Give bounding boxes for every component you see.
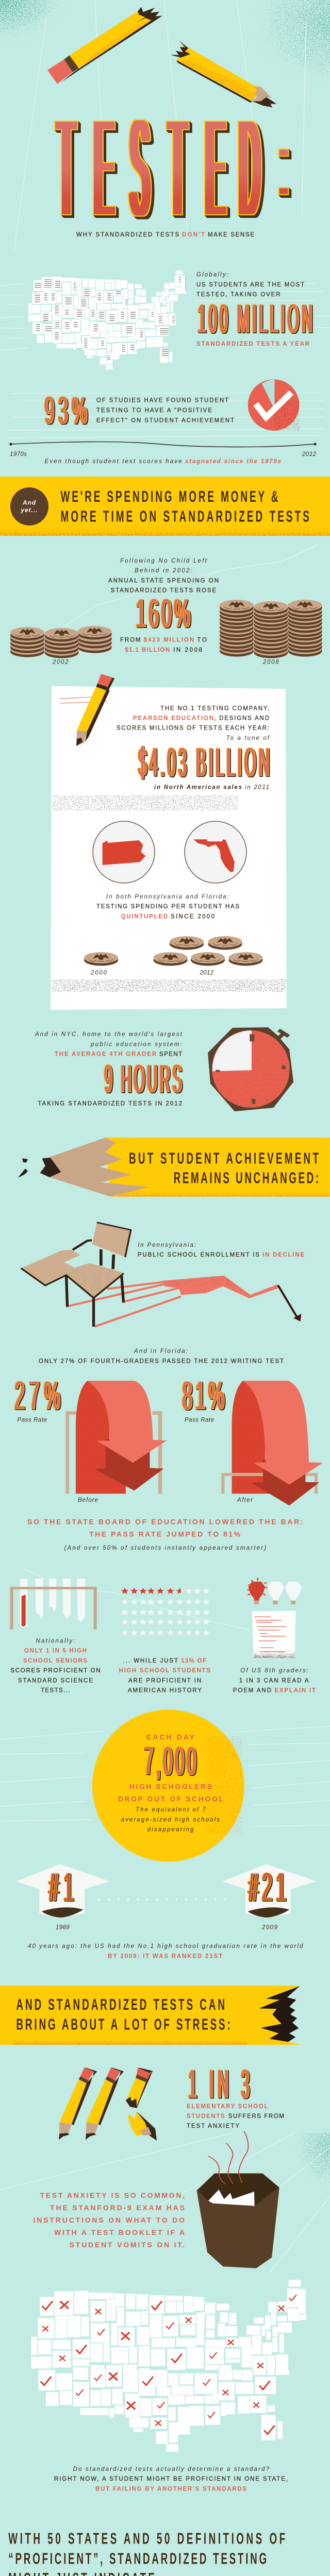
stat: 7,000: 7,000 xyxy=(144,1738,196,1783)
coin stacks: 2008 xyxy=(220,600,322,666)
year labels xyxy=(56,1924,278,1930)
heading: AND STANDARDIZED TESTS CAN xyxy=(16,1996,225,2013)
chart: after, bar lowered xyxy=(221,1381,323,1505)
text: american history: ... WHILE JUST xyxy=(123,1658,178,1664)
icon: Florida xyxy=(185,821,246,883)
text: quintupled: SINCE 2000 xyxy=(171,913,214,920)
text: nyc xyxy=(35,1031,183,1058)
text: quintupled: In both Pennsylvania and Florida: xyxy=(106,894,229,900)
text: no.1 testing company: To a tune of xyxy=(226,735,270,741)
text: no.1 testing company: THE NO.1 TESTING COMPANY, xyxy=(160,705,269,711)
text: from 423 million xyxy=(120,637,207,653)
text: elementary: TEST ANXIETY xyxy=(187,2123,239,2129)
text: globally: US STUDENTS ARE THE MOST xyxy=(196,282,304,288)
year labels: 2009 xyxy=(261,1924,278,1930)
text: quintupled xyxy=(96,894,239,920)
scratch lines xyxy=(0,1726,330,1826)
text: scores stagnated xyxy=(44,459,281,465)
text: pennsylvania: PUBLIC SCHOOL ENROLLMENT IS xyxy=(138,1252,259,1258)
captions xyxy=(78,1497,253,1503)
badge: and yet xyxy=(10,487,48,526)
map of US with checks and crosses xyxy=(31,2280,306,2452)
scratch lines xyxy=(0,283,330,438)
text: high schoolers xyxy=(118,1783,223,1833)
stat: 160%: 160% xyxy=(136,590,190,636)
stat: 93%: 93% xyxy=(44,389,87,432)
rank: #21: #21 xyxy=(248,1864,286,1909)
subtitle xyxy=(76,232,254,238)
text: nationally: SCHOOL SENIORS xyxy=(23,1658,87,1664)
rank: #1: #1 xyxy=(48,1864,73,1909)
text: florida xyxy=(39,1348,284,1364)
text: studies: OF STUDIES HAVE FOUND STUDENT xyxy=(96,398,228,404)
text: from 423 million: IN 2008 xyxy=(173,647,202,653)
subtitle: WHY STANDARDIZED TESTS xyxy=(76,232,179,238)
text: vomits: TEST ANXIETY IS SO COMMON, xyxy=(40,2191,185,2199)
text: scores stagnated: stagnated since the 1970s xyxy=(185,459,281,465)
text: nationally: ONLY 1 IN 5 HIGH xyxy=(24,1648,87,1654)
caption: standardized tests a year: STANDARDIZED TESTS A YEAR xyxy=(196,341,310,347)
text: vomits: WITH A TEST BOOKLET IF A xyxy=(54,2228,185,2236)
text: american history: ARE PROFICIENT IN xyxy=(128,1677,201,1684)
captions: Before xyxy=(78,1497,98,1503)
coin stacks: 2002 xyxy=(10,626,112,666)
pie chart: 93% with check mark xyxy=(248,379,300,431)
year labels: 1969 xyxy=(56,1924,70,1930)
panel: test anxiety xyxy=(0,2061,330,2274)
panel: 50 states map xyxy=(31,2280,306,2492)
yellow circle xyxy=(92,1709,244,1862)
dotted line between caps xyxy=(99,1899,235,1901)
heading: REMAINS UNCHANGED: xyxy=(174,1170,319,1187)
title: TESTED xyxy=(58,91,260,246)
text: no.1 testing company xyxy=(117,705,270,741)
coins: 2000 vs 2012: 2000 xyxy=(90,970,107,976)
header section xyxy=(47,7,287,246)
coin stacks: 2002: 2002 xyxy=(52,659,69,666)
rising white line xyxy=(63,545,318,627)
text: nyc: public education system: xyxy=(90,1041,182,1047)
stat: 1 in 3: 1 IN 3 xyxy=(188,2061,249,2107)
panel: Florida writing test xyxy=(14,1348,323,1551)
icon: stopwatch xyxy=(208,1027,293,1111)
caption: each day: EACH DAY xyxy=(146,1733,195,1741)
text: globally xyxy=(196,272,304,298)
text: nyc: And in NYC, home to the world's largest xyxy=(35,1031,183,1038)
text: no.1 testing company: SCORES MILLIONS OF TESTS EACH YEAR: xyxy=(117,725,269,732)
chart: before, arrow barely over the bar xyxy=(65,1381,167,1494)
text: globally: TESTED, TAKING OVER xyxy=(196,292,280,298)
heading: BRING ABOUT A LOT OF STRESS: xyxy=(16,2016,230,2033)
icon: trash can with papers and fumes xyxy=(196,2131,279,2268)
caption: taking standardized tests: TAKING STANDARDIZED TESTS IN 2012 xyxy=(38,1101,182,1107)
text: nationally xyxy=(10,1638,101,1694)
text: pennsylvania: IN DECLINE xyxy=(262,1252,304,1258)
icon: graduation cap 1969 xyxy=(16,1864,110,1918)
badge: and yet: And xyxy=(22,499,36,506)
text: graduation rate: BY 2009: IT WAS RANKED 21ST xyxy=(108,1953,222,1959)
heading xyxy=(16,1996,230,2033)
callout: lowered the bar: SO THE STATE BOARD OF EDUCATION LOWERED THE BAR: xyxy=(27,1518,303,1526)
line chart: flat test scores 1970s to 2012: 2012 xyxy=(302,451,317,457)
text: studies: TESTING TO HAVE A "POSITIVE xyxy=(96,408,212,414)
text: high schoolers: HIGH SCHOOLERS xyxy=(129,1783,212,1791)
heading: WE'RE SPENDING MORE MONEY & xyxy=(61,488,278,505)
icon: test tubes xyxy=(10,1579,97,1630)
map of US made from test papers xyxy=(28,270,186,369)
heading: conclusion: WITH 50 STATES AND 50 DEFINITIONS OF xyxy=(8,2530,285,2548)
text: nationally: Nationally: xyxy=(36,1638,75,1644)
heading: BUT STUDENT ACHIEVEMENT xyxy=(129,1150,319,1167)
callout: lowered the bar xyxy=(27,1518,303,1551)
heading xyxy=(61,488,309,526)
panel: NYC 9 hours xyxy=(35,1027,293,1111)
heading: conclusion: “PROFICIENT”, STANDARDIZED TESTING xyxy=(8,2550,267,2568)
text: studies: EFFECT" ON STUDENT ACHIEVEMENT xyxy=(96,417,234,423)
text: pennsylvania xyxy=(138,1242,304,1258)
text: american history: 13% OF xyxy=(181,1658,206,1664)
text: scores stagnated: Even though student test scores have xyxy=(44,459,182,465)
stat: $4.03 billion: $4.03 BILLION xyxy=(138,739,269,785)
callout: lowered the bar: THE PASS RATE JUMPED TO 81% xyxy=(89,1530,241,1538)
heading: conclusion xyxy=(8,2530,285,2576)
line chart: flat test scores 1970s to 2012 xyxy=(9,442,317,457)
text: vomits: INSTRUCTIONS ON WHAT TO DO xyxy=(33,2216,185,2224)
text: pennsylvania: In Pennsylvania: xyxy=(138,1242,196,1248)
stat: 9 hours: 9 HOURS xyxy=(104,1057,182,1101)
scratch lines xyxy=(0,2133,330,2274)
text: standards xyxy=(54,2466,288,2492)
text: american history xyxy=(119,1658,210,1694)
text: from 423 million: $423 MILLION xyxy=(144,637,194,643)
text: standards: RIGHT NOW, A STUDENT MIGHT BE PROFICIENT IN ONE STATE, xyxy=(54,2476,288,2482)
panel: national proficiency xyxy=(10,1569,316,1694)
text: globally: Globally: xyxy=(196,272,228,278)
text: high schoolers: DROP OUT OF SCHOOL xyxy=(118,1795,223,1803)
caption: Pass Rate xyxy=(18,1417,47,1423)
text: 8th graders: POEM AND xyxy=(233,1688,271,1694)
icon: graduation cap 2009 xyxy=(222,1864,317,1918)
panel: global testing xyxy=(0,270,330,465)
text: 8th graders: Of US 8th graders: xyxy=(240,1668,308,1674)
subtitle: DON'T xyxy=(182,232,205,238)
icon: light bulbs xyxy=(247,1578,302,1604)
text: vomits: STUDENT VOMITS ON IT. xyxy=(70,2241,185,2249)
text: no child left behind xyxy=(108,558,219,594)
coins: 2000 vs 2012 xyxy=(84,936,263,976)
icon: pencil with motion lines xyxy=(60,674,114,746)
text: elementary: SUFFERS FROM xyxy=(228,2113,284,2120)
text: 8th graders: 1 IN 3 CAN READ A xyxy=(239,1677,309,1684)
text: nyc: THE AVERAGE 4TH GRADER xyxy=(55,1052,157,1058)
coin stacks: 2008: 2008 xyxy=(262,659,279,666)
text: from 423 million: FROM xyxy=(120,637,140,643)
panel: Pearson (white card) xyxy=(51,674,287,1010)
text: no child left behind: STANDARDIZED TESTS ROSE xyxy=(111,588,216,594)
coins: 2000 vs 2012: 2012 xyxy=(200,970,214,976)
text: nationally: TESTS... xyxy=(41,1688,70,1694)
stat: 100 million: 100 MILLION xyxy=(197,295,312,341)
text: quintupled: TESTING SPENDING PER STUDENT HAS xyxy=(96,904,239,910)
stat: 81%: 81% xyxy=(182,1372,224,1418)
text: north american sales: in North American sales xyxy=(154,785,242,791)
icon: test paper xyxy=(252,1611,295,1658)
speckle band xyxy=(53,795,238,810)
text: nationally: STANDARD SCIENCE xyxy=(18,1677,93,1684)
banner: stress xyxy=(0,1986,301,2045)
icon: broken pencil, tip half xyxy=(170,40,277,107)
banner: and yet xyxy=(0,477,330,536)
text: from 423 million: $1.1 BILLION xyxy=(125,647,170,653)
text: florida: And in Florida: xyxy=(134,1348,188,1354)
heading xyxy=(129,1150,319,1187)
text: nyc: SPENT xyxy=(159,1052,182,1058)
panel: state spending xyxy=(10,545,322,666)
text: no.1 testing company: , DESIGNS AND xyxy=(214,715,269,721)
text: studies xyxy=(96,398,234,423)
icon: stars, 13 of 100 xyxy=(121,1588,210,1636)
captions: After xyxy=(237,1497,253,1503)
text: vomits xyxy=(33,2191,185,2249)
icon: three pencils, one broken xyxy=(59,2067,157,2141)
text: north american sales: in 2011 xyxy=(245,785,269,791)
text: no child left behind: ANNUAL STATE SPENDING ON xyxy=(108,578,219,584)
text: no child left behind: Behind in 2002: xyxy=(135,568,192,574)
panel: Pennsylvania enrollment xyxy=(21,1223,304,1327)
callout: lowered the bar: (And over 50% of students instantly appeared smarter) xyxy=(64,1545,266,1551)
text: 8th graders xyxy=(233,1668,316,1694)
white scratch lines: header xyxy=(14,0,306,252)
text: american history: AMERICAN HISTORY xyxy=(128,1688,202,1694)
panel: graduation rankings xyxy=(16,1864,317,1959)
banner: but student achievement xyxy=(18,1138,330,1197)
icon: Pennsylvania xyxy=(93,821,155,883)
grunge on circle xyxy=(206,1736,242,1834)
text: high schoolers: disappearing xyxy=(147,1827,194,1833)
text: american history: HIGH SCHOOL STUDENTS xyxy=(119,1668,210,1674)
text: graduation rate xyxy=(28,1943,303,1959)
broken pencil banner xyxy=(0,1986,301,2045)
text: standards: Do standardized tests actually determine a standard? xyxy=(73,2466,270,2472)
illustration: school desk with falling arrow shadow xyxy=(21,1223,301,1327)
text: 8th graders: EXPLAIN IT xyxy=(274,1688,316,1694)
title: : xyxy=(280,115,287,215)
speckle band xyxy=(52,979,286,992)
heading: MORE TIME ON STANDARDIZED TESTS xyxy=(61,508,309,526)
text: standards: BUT FAILING BY ANOTHER'S STANDARDS xyxy=(95,2486,246,2492)
text: florida: ONLY 27% OF FOURTH-GRADERS PASSED THE 2012 WRITING TEST xyxy=(39,1358,284,1364)
panel: dropouts circle xyxy=(0,1709,330,1862)
subtitle: MAKE SENSE xyxy=(208,232,254,238)
text: nationally: SCORES PROFICIENT ON xyxy=(10,1668,101,1674)
text: graduation rate: 40 years ago: the US had the No.1 high school graduation rate in the world xyxy=(28,1943,303,1950)
text: quintupled: QUINTUPLED xyxy=(121,913,168,920)
text: high schoolers: The equivalent of 7 xyxy=(136,1807,206,1813)
icon: giant pencil point banner xyxy=(18,1138,330,1197)
caption: Pass Rate xyxy=(185,1417,214,1423)
text: vomits: THE STANFORD-9 EXAM HAS xyxy=(50,2204,185,2212)
white scratch line xyxy=(24,1569,254,1635)
text: no.1 testing company: PEARSON EDUCATION xyxy=(133,715,213,721)
icon: broken pencil, eraser half xyxy=(47,7,162,84)
stat: 27%: 27% xyxy=(14,1372,60,1418)
text: elementary xyxy=(187,2104,284,2129)
text: elementary: ELEMENTARY SCHOOL xyxy=(187,2104,268,2110)
text: high schoolers: average-sized high schools xyxy=(121,1817,220,1823)
text: no child left behind: Following No Child Left xyxy=(120,558,207,564)
text: from 423 million: TO xyxy=(197,637,207,643)
badge: and yet: yet... xyxy=(20,506,38,514)
text: elementary: STUDENTS xyxy=(187,2113,225,2120)
line chart: flat test scores 1970s to 2012: 1970s xyxy=(10,451,27,457)
